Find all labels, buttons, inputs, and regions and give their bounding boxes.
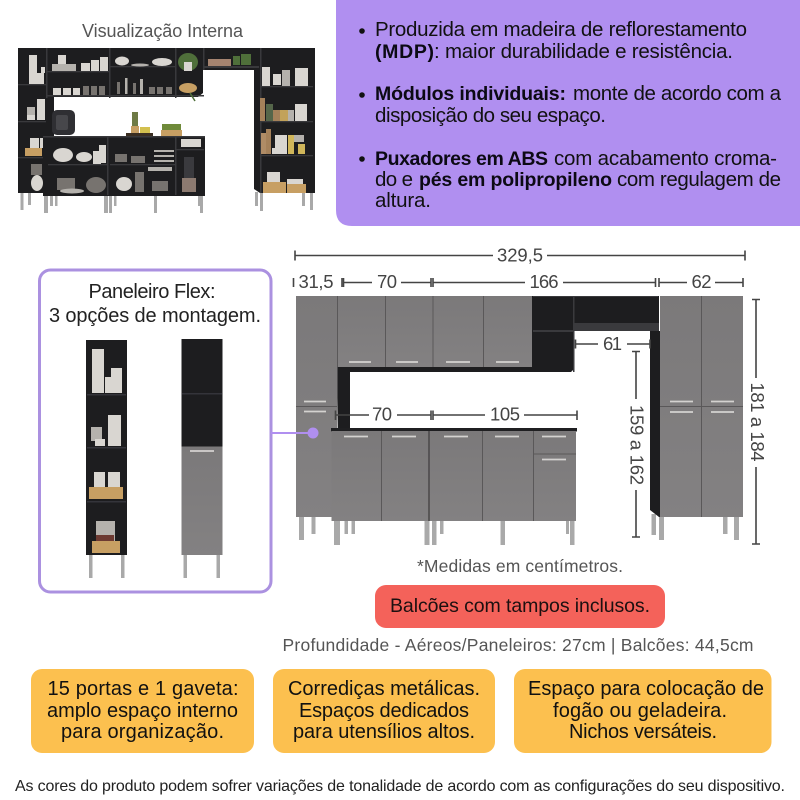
dimension: 166: 166 [530,271,558,292]
card: corredicas [273,669,495,753]
depth note: Profundidade - Aéreos/Paneleiros: 27cm | Balcões: 44,5cm [282,635,754,655]
legs [20,192,313,213]
kitchen front view [296,296,743,545]
bullet: puxadores: do e [375,168,413,191]
dimension: 105 [433,404,577,424]
bullet: puxadores: pés em polipropileno [419,169,612,191]
legs [299,514,739,545]
dimensions [294,244,768,544]
card: fogao: Espaço para colocação de [528,678,764,700]
dimension: 62: 62 [692,271,712,292]
bullet: puxadores: com acabamento croma- [554,147,777,170]
bullet: modulos: Módulos individuais: [375,83,566,105]
card: corredicas: para utensílios altos. [293,721,475,743]
heading: Paneleiro Flex: Paneleiro Flex: [88,281,216,303]
bullet: modulos: disposição do seu espaço. [375,104,606,127]
kitchen items [25,53,308,194]
upper doors [338,296,532,367]
open tower [86,340,127,578]
panel background [336,0,800,226]
bullet: modulos [359,82,782,127]
panel frame [40,270,271,592]
card: portas e gaveta [31,669,254,753]
dimension: total width 329,5 [295,244,745,266]
panel: Paneleiro Flex [40,270,271,592]
dimension: 70 lower [335,404,431,424]
dimension: 31,5: 31,5 [298,271,334,292]
bullet: puxadores: Puxadores em ABS [375,148,548,170]
dimension: 159 a 162 [626,352,648,537]
panel: feature bullets [336,0,800,226]
right tower [660,296,743,517]
card: corredicas: Espaços dedicados [299,700,469,722]
open shelves [533,296,659,372]
image: open black kitchen cabinets [18,48,315,213]
bullet: puxadores: altura. [375,189,431,212]
dimension: 70 lower: 70 [372,404,392,424]
dimension: 70 upper: 70 [377,271,397,292]
shelves [18,48,313,195]
bullet: madeira: (MDP) [375,41,434,63]
heading: Paneleiro Flex [49,281,261,327]
dimension: 181 a 184: 181 a 184 [747,382,768,462]
callout: countertops included: Balcões com tampos inclusos. [390,595,650,617]
dimension: 62 [659,271,743,292]
base cabinet [331,428,577,521]
heading: Paneleiro Flex: 3 opções de montagem. [49,305,261,327]
bullet: puxadores: com regulagem de [617,168,781,191]
footer disclaimer: As cores do produto podem sofrer variações de tonalidade de acordo com as configurações do seu dispositivo. [15,778,785,795]
card: fogao [514,669,772,753]
heading: interior view: Visualização Interna [82,21,244,41]
left tower [296,296,338,517]
dimension: 181 a 184 [747,300,768,544]
bullet: puxadores [359,147,781,212]
dark carcass [337,296,660,517]
card: corredicas: Corrediças metálicas. [288,678,480,700]
dimension: 159 a 162: 159 a 162 [626,405,648,485]
dimension: 70 upper [343,271,431,292]
bullet: madeira: Produzida em madeira de reflorestamento [375,18,747,41]
card: portas e gaveta: amplo espaço interno [47,700,238,722]
cabinet bodies [18,48,315,196]
card: portas e gaveta: para organização. [61,721,224,743]
tower with door [182,339,222,578]
callout: countertops included [375,585,665,628]
dimension: 61 [575,333,650,354]
bullet: modulos: monte de acordo com a [573,82,782,105]
card: portas e gaveta: 15 portas e 1 gaveta: [48,678,238,700]
card: fogao: Nichos versáteis. [569,721,717,743]
note: measurements: *Medidas em centímetros. [417,556,623,576]
panel: interior view [18,21,315,213]
dimension: 166 [433,271,656,292]
card: fogao: fogão ou geladeira. [553,700,727,722]
bullet: madeira: : maior durabilidade e resistência. [434,40,733,63]
connector to kitchen [271,428,318,438]
bullet: madeira [359,18,747,63]
dimension: 105: 105 [490,404,520,424]
dimension: 61: 61 [603,333,622,354]
dimension: total width 329,5: 329,5 [497,244,543,266]
